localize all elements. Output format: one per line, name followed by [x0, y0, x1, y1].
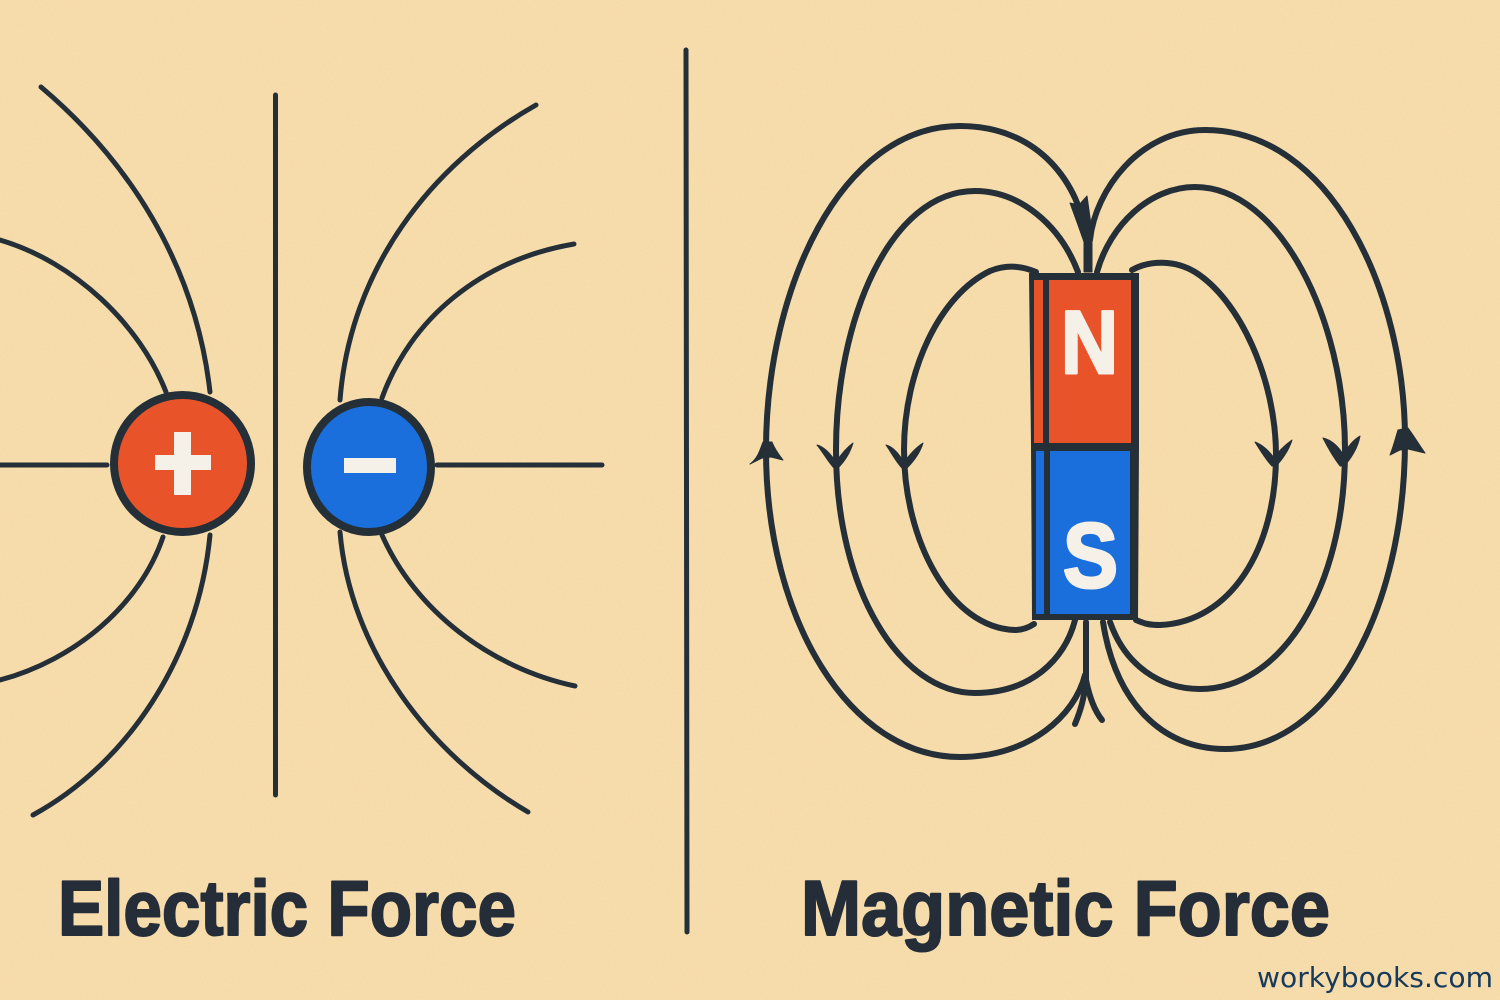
- icon: negative charge: [307, 402, 431, 532]
- icon: positive charge: [114, 395, 251, 532]
- arrows on field lines: [750, 196, 1425, 468]
- panel: electric force diagram: [0, 87, 602, 815]
- heading: Magnetic Force: Magnetic Force: [801, 864, 1330, 952]
- central vertical line between charges: [273, 95, 278, 795]
- label: S: S: [1063, 505, 1118, 607]
- watermark: workybooks.com: workybooks.com: [1257, 961, 1493, 994]
- magnetic field lines, right side: [1090, 130, 1405, 749]
- label: N: N: [1061, 292, 1118, 392]
- electric field lines from positive charge: [0, 87, 210, 815]
- panel: magnetic force diagram: [750, 126, 1425, 757]
- heading: Electric Force: Electric Force: [58, 864, 516, 952]
- electric field lines from negative charge: [340, 105, 602, 812]
- field line tail below south pole: [1075, 622, 1102, 724]
- north pole fill: [1034, 280, 1043, 443]
- panel divider: [686, 50, 687, 932]
- magnet body outline: [1029, 273, 1139, 620]
- south pole fill: [1036, 451, 1044, 614]
- magnetic field lines, left side: [766, 126, 1087, 757]
- bar magnet: [1029, 273, 1139, 620]
